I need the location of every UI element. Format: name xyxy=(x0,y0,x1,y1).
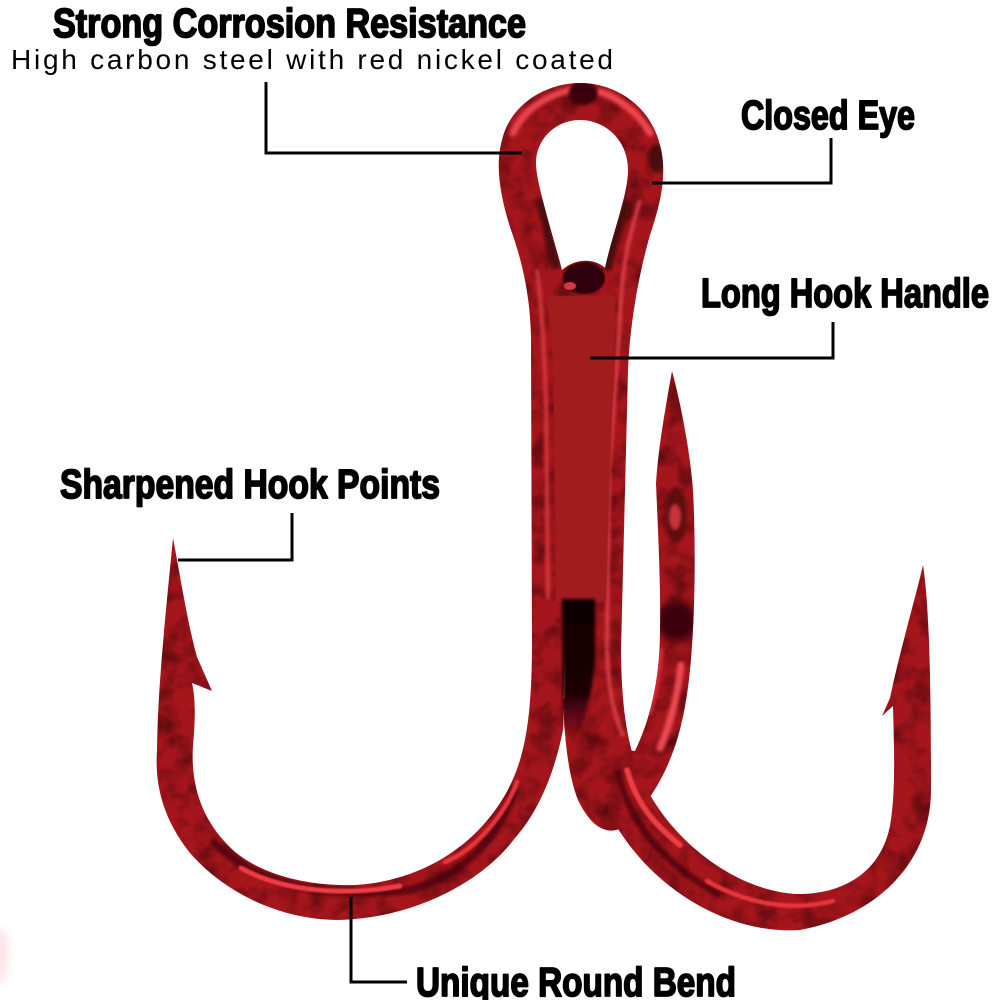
subheading: High carbon steel with red nickel coated xyxy=(11,44,613,75)
callout: corrosion resistance xyxy=(11,0,613,153)
eye knot xyxy=(563,262,605,294)
label: Sharpened Hook Points xyxy=(60,461,440,507)
callout: unique round bend xyxy=(351,897,736,1000)
heading: Strong Corrosion Resistance xyxy=(53,0,526,46)
leader line xyxy=(266,82,522,153)
back hook xyxy=(564,371,695,831)
leader line xyxy=(351,897,407,982)
treble hook illustration xyxy=(150,80,935,935)
leader line xyxy=(590,322,833,358)
shank and closed eye xyxy=(495,80,670,655)
left hook xyxy=(150,530,570,925)
faint smudge lower left xyxy=(0,927,9,983)
flat shank panel xyxy=(547,296,616,602)
right hook xyxy=(570,560,935,935)
eye highlights xyxy=(513,90,570,133)
leader line xyxy=(178,513,292,560)
dark gap between hooks xyxy=(562,599,595,745)
leader line xyxy=(652,138,831,183)
callout: sharpened hook points xyxy=(60,461,440,560)
callout: closed eye xyxy=(652,92,915,183)
callout: long hook handle xyxy=(590,270,989,358)
label: Closed Eye xyxy=(741,92,915,138)
shank highlights xyxy=(537,270,548,600)
